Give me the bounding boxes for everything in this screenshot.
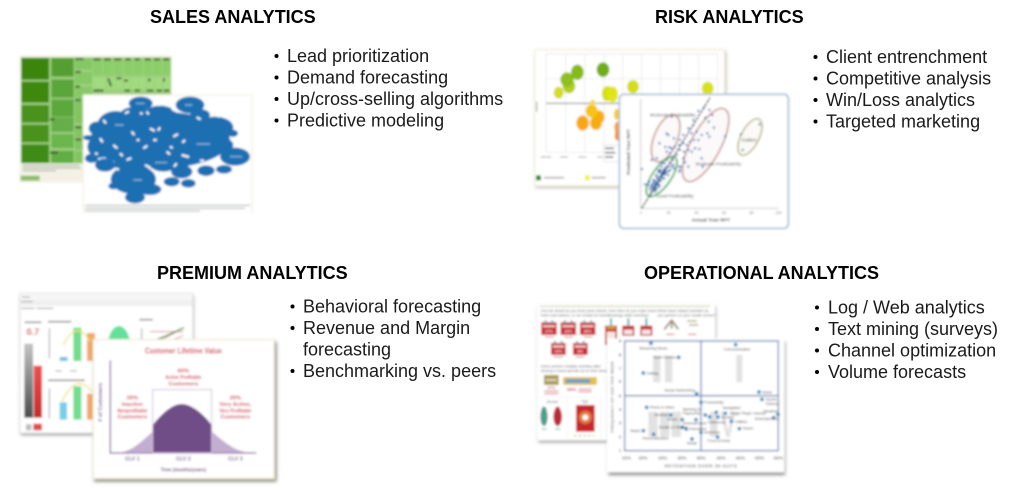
quadrant chart panel: Education — [689, 427, 706, 431]
quadrant chart panel: 55% — [774, 455, 784, 460]
quadrant chart panel: Music — [630, 429, 640, 433]
heading: sales analytics: SALES ANALYTICS — [150, 7, 316, 27]
survey infographic panel: hotel reservations, or car rentals for travel? — [541, 313, 610, 317]
survey infographic panel: Age — [582, 399, 588, 403]
scatter chart panel: 40 — [694, 211, 698, 215]
heading: operational analytics: OPERATIONAL ANALYTICS — [644, 263, 879, 283]
heading: risk analytics: RISK ANALYTICS — [655, 7, 804, 27]
quadrant chart panel: RETENTION OVER 30 DAYS — [665, 463, 737, 468]
bullet list: risk analytics: Competitive analysis — [826, 68, 991, 88]
quadrant chart panel: 40% — [716, 455, 727, 460]
quadrant chart panel: Retail — [687, 442, 697, 446]
customer lifetime value panel: Customers — [221, 415, 250, 421]
quadrant chart panel: Productivity — [704, 401, 724, 405]
quadrant chart panel: Payments — [683, 411, 700, 415]
bullet list: premium analytics: Benchmarking vs. peers — [303, 361, 496, 381]
quadrant chart panel: Sport Games — [653, 356, 676, 360]
survey infographic panel: How far ahead do you book plane tickets, — [541, 309, 608, 313]
quadrant chart panel: 1 — [619, 448, 622, 453]
survey infographic panel: 47% — [547, 385, 556, 390]
scatter chart panel: 100 — [775, 211, 781, 215]
scatter chart panel: 80 — [750, 211, 754, 215]
treemap panel — [19, 55, 172, 183]
scatter chart panel: 20 — [667, 211, 671, 215]
quadrant chart panel: 6 — [619, 379, 622, 384]
scatter chart panel: 60 — [722, 211, 726, 215]
scatter chart panel: Actual Tran RPT — [692, 218, 730, 224]
quadrant chart panel: Medical — [655, 413, 668, 417]
heading: premium analytics: PREMIUM ANALYTICS — [157, 263, 348, 283]
quadrant chart panel: 30% — [677, 455, 688, 460]
quadrant chart panel: 15% — [622, 455, 632, 460]
scatter chart panel: Moderate Predictability — [650, 113, 696, 118]
quadrant chart panel: Social Networking — [664, 389, 695, 393]
quadrant chart panel: Streaming Music — [639, 346, 668, 350]
bubble timeline chart — [534, 49, 726, 188]
bubble chart panel — [83, 94, 253, 213]
bullet list: operational analytics: Channel optimization — [828, 340, 996, 360]
bullet list: risk analytics: Win/Loss analytics — [826, 90, 975, 110]
survey infographic panel: 23% — [564, 329, 573, 334]
panel: premium analytics — [20, 263, 496, 482]
quadrant chart panel: 3 — [619, 421, 622, 426]
survey infographic panel: viewing a travel-specific ad on their device — [541, 369, 609, 373]
customer lifetime value panel: Customer Lifetime Value — [145, 345, 222, 355]
quadrant chart panel: Travel — [742, 427, 753, 431]
customer lifetime value panel: Customers — [118, 415, 147, 421]
panel: operational analytics — [537, 263, 998, 475]
visual: operational infographic and quadrant chart — [537, 304, 785, 475]
quadrant chart panel: 20% — [638, 455, 649, 460]
quadrant chart panel: 45% — [736, 455, 746, 460]
quadrant chart panel: Entertainment — [755, 417, 780, 421]
quadrant chart panel: Navigation — [723, 406, 741, 410]
survey infographic panel: 17% — [545, 329, 553, 334]
customer lifetime value panel — [93, 339, 277, 482]
customer lifetime value panel: Inactive — [122, 402, 143, 408]
quadrant chart panel: 25% — [658, 455, 668, 460]
quadrant chart panel: 5 — [619, 393, 622, 398]
scatter chart panel — [619, 94, 788, 228]
quadrant chart panel: Personalization — [642, 437, 669, 441]
quadrant chart panel: 35% — [696, 455, 707, 460]
quadrant chart panel: 4 — [619, 407, 622, 412]
survey infographic panel: 38% — [584, 329, 592, 334]
quadrant chart panel: Single Player Games — [730, 412, 766, 416]
panel: sales analytics — [19, 7, 503, 213]
quadrant chart panel: Health & Fitness — [659, 425, 687, 429]
bullet list: operational analytics: Log / Web analytics — [828, 298, 985, 318]
bullet list: premium analytics: Behavioral forecasting — [303, 296, 481, 316]
customer lifetime value panel: CLV 1 — [125, 456, 140, 462]
scatter chart panel: Good Predictability — [656, 193, 694, 198]
quadrant chart panel: Sports — [766, 398, 777, 402]
customer lifetime value panel: Time (months/years) — [161, 468, 206, 474]
bullet list: premium analytics: Revenue and Margin — [303, 318, 470, 338]
customer lifetime value panel: 20% — [127, 396, 138, 402]
quadrant chart panel: Reference — [708, 420, 726, 424]
customer lifetime value panel: Customers — [169, 381, 198, 387]
visual: risk bubble and scatter charts — [534, 49, 788, 228]
customer lifetime value panel: Very Profitable — [219, 408, 251, 414]
quadrant chart panel: Food & Drink — [708, 439, 730, 443]
quadrant chart panel: Music — [668, 418, 678, 422]
bullet list: sales analytics: Predictive modeling — [287, 110, 444, 130]
survey infographic panel: How often do you make travel — [608, 309, 657, 313]
bullet list: premium analytics — [290, 296, 496, 381]
quadrant chart panel: Weather — [763, 410, 778, 414]
scatter chart panel: Moderate Predictability — [696, 162, 742, 167]
quadrant chart panel: Utilities — [735, 420, 747, 424]
quadrant chart panel — [607, 338, 785, 475]
bullet list: sales analytics: Lead prioritization — [287, 46, 429, 66]
survey infographic panel — [537, 304, 716, 442]
customer lifetime value panel: CLV 2 — [176, 456, 191, 462]
bullet list: premium analytics: forecasting — [303, 340, 391, 360]
visual: premium dashboard and lifetime value chart — [20, 293, 277, 482]
quadrant chart panel: Dating — [647, 371, 658, 375]
quadrant chart panel: 50% — [755, 455, 765, 460]
customer lifetime value panel: Active Profitable — [165, 375, 201, 381]
panel: risk analytics — [534, 7, 991, 228]
quadrant chart panel: 7 — [619, 366, 622, 371]
quadrant chart panel: 2 — [619, 434, 622, 439]
quadrant chart panel: Photo & Video — [650, 406, 674, 410]
survey infographic panel: you perform on your mobile device? — [658, 313, 716, 317]
dashboard panel: 0.7 — [26, 327, 39, 337]
quadrant chart panel: Entertainment — [683, 422, 708, 426]
survey infographic panel: 8% — [577, 349, 584, 354]
quadrant chart panel: 9 — [619, 339, 622, 344]
customer lifetime value panel: CLV 3 — [228, 456, 243, 462]
scatter chart panel: 0 — [640, 211, 642, 215]
bullet list: operational analytics: Volume forecasts — [828, 362, 966, 382]
visual: sales treemap and bubble chart — [19, 55, 253, 213]
customer lifetime value panel: Very Active, — [219, 402, 252, 408]
dashboard panel — [20, 293, 193, 435]
survey infographic panel: bookings while traveling? — [608, 313, 649, 317]
quadrant chart panel: Communication — [724, 347, 750, 351]
bullet list: sales analytics — [274, 46, 503, 130]
customer lifetime value panel: # of Customers — [98, 383, 104, 422]
survey infographic panel: Users perform multiple activities after — [541, 364, 602, 368]
survey infographic panel: What travel-related activities do — [658, 309, 709, 313]
quadrant chart panel: News — [762, 390, 772, 394]
customer lifetime value panel: 60% — [178, 368, 189, 374]
customer lifetime value panel: Nonprofitable — [117, 408, 147, 414]
bullet list: risk analytics — [814, 47, 991, 132]
bullet list: sales analytics: Up/cross-selling algorithms — [287, 89, 503, 109]
scatter chart panel: Outliers — [741, 138, 758, 143]
bullet list: sales analytics: Demand forecasting — [287, 68, 448, 88]
quadrant chart panel: FREQUENCY OF USE PER WEEK — [609, 361, 614, 432]
survey infographic panel: Gender — [546, 400, 559, 404]
quadrant chart panel: Science — [766, 402, 779, 406]
scatter chart panel: Predicted Tran RPT — [626, 129, 632, 175]
bullet list: operational analytics: Text mining (surveys) — [828, 319, 998, 339]
quadrant chart panel: Banking & — [683, 407, 701, 411]
bullet list: operational analytics — [815, 298, 998, 382]
customer lifetime value panel: 20% — [230, 396, 241, 402]
survey infographic panel: 13% — [554, 349, 563, 354]
quadrant chart panel: 8 — [619, 353, 622, 358]
bullet list: risk analytics: Client entrenchment — [826, 47, 987, 67]
quadrant chart panel: Business — [704, 431, 720, 435]
survey infographic panel: 56% — [567, 387, 577, 392]
bullet list: risk analytics: Targeted marketing — [826, 112, 980, 132]
quadrant chart panel: Books — [722, 416, 732, 420]
